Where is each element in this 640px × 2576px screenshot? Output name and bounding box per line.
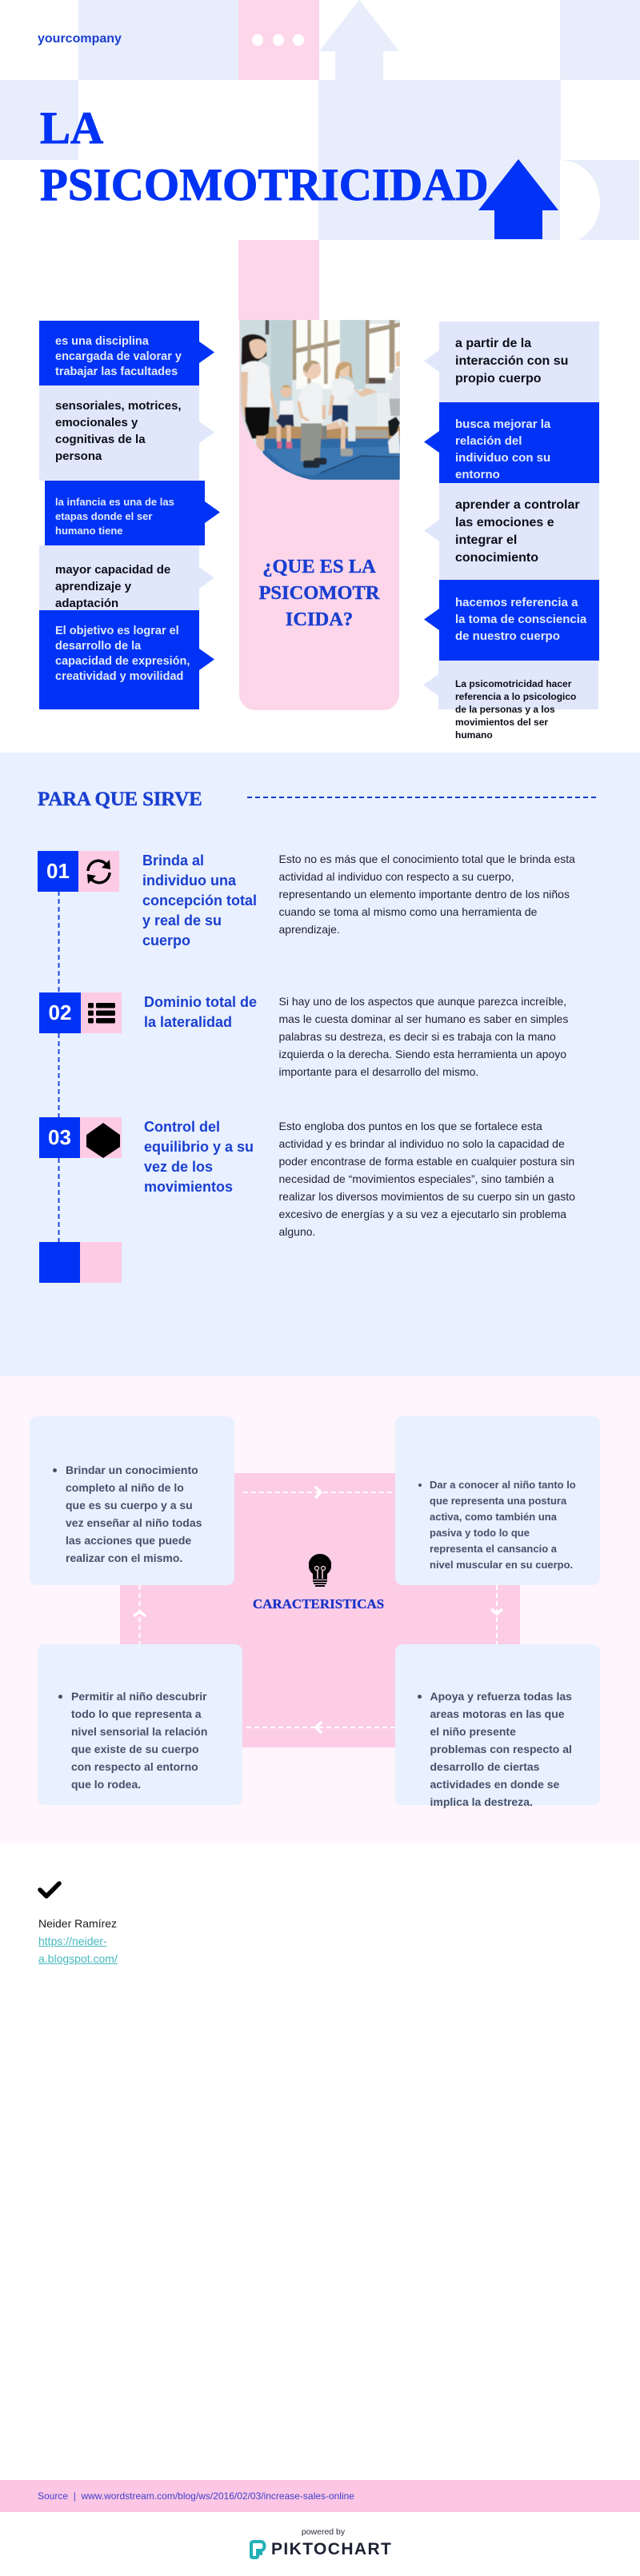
card text: Apoya y refuerza todas las (430, 1690, 572, 1703)
callout 1 (39, 321, 199, 385)
step title (144, 1119, 254, 1195)
callout 7: individuo con su (455, 451, 550, 465)
heading: caracteristicas: CARACTERISTICAS (253, 1596, 384, 1611)
step title: cuerpo (142, 933, 190, 949)
callout 8 (439, 483, 599, 580)
step text: actividad y es brindar al individuo no solo la capacidad de (278, 1137, 565, 1150)
callout 6: interacción con su (455, 354, 568, 368)
panel: caracteristicas (0, 1376, 640, 1843)
card 3 (38, 1644, 242, 1805)
number 01: 01 (46, 859, 70, 883)
callout 7 (439, 402, 599, 483)
callout 7: relación del (455, 434, 522, 448)
step title: Dominio total de (144, 994, 257, 1010)
callout 9 (439, 580, 599, 661)
panel: right definition callouts: movimientos del ser (455, 717, 548, 728)
card text: que lo rodea. (71, 1778, 141, 1791)
card 2 (395, 1416, 600, 1585)
card text: problemas con respecto al (430, 1743, 572, 1755)
logo wordmark: PIKTOCHART (271, 2540, 392, 2558)
callout 5: capacidad de expresión, (55, 655, 190, 668)
callout 5 (39, 610, 199, 709)
icon: list (81, 992, 122, 1033)
bullet (53, 1468, 57, 1472)
author credit: a.blogspot.com/ (38, 1952, 118, 1965)
step title: individuo una (142, 873, 236, 889)
step title: Brinda al (142, 853, 204, 869)
number 03: 03 (48, 1125, 71, 1149)
panel: para que sirve (0, 753, 640, 1376)
card text (430, 1479, 576, 1571)
callout 6: propio cuerpo (455, 372, 542, 385)
card text: areas motoras en las que (430, 1707, 565, 1720)
icon: light bulb (309, 1554, 331, 1587)
callout 9: la toma de consciencia (455, 613, 586, 626)
step text: actividad al individuo con respecto a su cuerpo, (278, 870, 514, 883)
source text: Source | www.wordstream.com/blog/ws/2016/02/03/increase-sales-online (38, 2490, 354, 2502)
callout 9: de nuestro cuerpo (455, 629, 560, 643)
callout 9: hacemos referencia a (455, 596, 578, 609)
heading: que es: ICIDA? (286, 609, 353, 630)
arrows: dashed connectors (133, 1486, 503, 1734)
card text: desarrollo de ciertas (430, 1760, 539, 1773)
card text: representa el cansancio a (430, 1543, 557, 1555)
header background tiles (0, 0, 640, 320)
heading: que es: ¿QUE ES LA (262, 556, 376, 577)
step 1 (38, 851, 575, 949)
callout 8: conocimiento (455, 551, 538, 565)
panel: right definition callouts (423, 322, 599, 741)
panel: que es la psicomotricidad (239, 320, 399, 710)
icon: pale up arrow (319, 0, 399, 80)
step text: poder encontrase de forma estable en cualquier postura sin (278, 1155, 574, 1168)
card 4 (395, 1644, 600, 1805)
empty final step (39, 1242, 122, 1283)
card text: las acciones que puede (66, 1534, 191, 1547)
callout 2: cognitivas de la (55, 433, 146, 446)
callout 7: entorno (455, 468, 500, 481)
step text: mas le cuesta dominar al ser humano es saber en simples (278, 1012, 568, 1025)
card text: que representa una postura (430, 1495, 566, 1507)
callout 6: a partir de la (455, 337, 531, 350)
author credit: Neider Ramírez (38, 1917, 117, 1930)
step title: concepción total (142, 893, 257, 909)
card text: completo al niño de lo (66, 1481, 184, 1494)
step text: izquierda o la derecha. Siendo esta herramienta un apoyo (278, 1048, 566, 1060)
card text (430, 1690, 572, 1808)
step text: alguno. (278, 1225, 315, 1238)
step title: la lateralidad (144, 1014, 232, 1030)
number 02 (39, 992, 81, 1033)
icon: check mark (38, 1881, 62, 1899)
logo: piktochart (250, 2540, 392, 2559)
menu dots (252, 34, 304, 46)
author credit: https://neider- (38, 1935, 107, 1947)
card text: nivel muscular en su cuerpo. (430, 1559, 573, 1571)
callout 3 (45, 481, 205, 545)
card text: implica la destreza. (430, 1795, 533, 1808)
step text: necesidad de “movimientos especiales”, sino también a (278, 1172, 554, 1185)
icon: hexagon (80, 1117, 122, 1158)
icon: blue up arrow (478, 159, 558, 239)
step text (278, 853, 575, 936)
callout 3: humano tiene (55, 525, 123, 537)
callout 10: de la personas y a los (455, 704, 555, 715)
card text: el niño presente (430, 1725, 516, 1738)
title: LA (40, 103, 103, 154)
bullet (58, 1695, 62, 1699)
card text: con respecto al entorno (71, 1760, 198, 1773)
card text: vez enseñar al niño todas (66, 1516, 202, 1529)
step text: representando un elemento importante dentro de los niños (278, 888, 570, 901)
heading: que es: PSICOMOTR (258, 582, 380, 604)
title: PSICOMOTRICIDAD (40, 160, 489, 210)
callout 4: adaptación (55, 597, 118, 610)
panel: left definition callouts (39, 321, 220, 709)
card text: nivel sensorial la relación (71, 1725, 207, 1738)
callout 2 (39, 385, 199, 481)
callout 4: mayor capacidad de (55, 563, 170, 577)
card text: Brindar un conocimiento (66, 1464, 198, 1476)
callout 7: busca mejorar la (455, 417, 550, 431)
callout 8: aprender a controlar (455, 498, 580, 512)
number 02: 02 (49, 1000, 71, 1024)
card text: activa, como también una (430, 1511, 557, 1523)
callout 5: desarrollo de la (55, 640, 141, 653)
step title (142, 853, 257, 949)
callout 1: es una disciplina (55, 335, 149, 348)
step text: cuando se toma al mismo como una herramienta de (278, 905, 537, 918)
callout 8: las emociones e (455, 516, 554, 529)
card text: Permitir al niño descubrir (71, 1690, 207, 1703)
logo mark (250, 2540, 266, 2559)
step text: Esto engloba dos puntos en los que se fortalece esta (278, 1120, 542, 1132)
card text (71, 1690, 207, 1791)
powered by: powered by (302, 2527, 345, 2537)
panel: right definition callouts: humano (455, 729, 493, 741)
callout 6 (439, 322, 599, 402)
author credit (38, 1917, 118, 1965)
card text: que es su cuerpo y a su (66, 1499, 193, 1512)
step title: vez de los (144, 1159, 213, 1175)
card text: actividades en donde se (430, 1778, 559, 1791)
callout 5: creatividad y movilidad (55, 670, 183, 683)
callout 4 (39, 545, 199, 610)
photo: children in gym class (240, 320, 400, 480)
callout 2: sensoriales, motrices, (55, 399, 182, 413)
step text: Esto no es más que el conocimiento total que le brinda esta (278, 853, 575, 865)
title (40, 103, 489, 210)
callout 5: El objetivo es lograr el (55, 625, 179, 637)
source bar (0, 2480, 640, 2512)
step title: Control del (144, 1119, 220, 1135)
number 03 (39, 1117, 80, 1158)
step text: palabras su destreza, es decir si es trabaja con la mano (278, 1030, 556, 1043)
callout 10: referencia a lo psicologico (455, 691, 576, 702)
bullet (418, 1484, 422, 1487)
card text: que existe de su cuerpo (71, 1743, 198, 1755)
step title: y real de su (142, 913, 222, 929)
step text: Si hay uno de los aspectos que aunque parezca increíble, (278, 995, 566, 1008)
number 01 (38, 851, 78, 892)
card 1 (30, 1416, 234, 1585)
card text: realizar con el mismo. (66, 1552, 182, 1564)
step text: aprendizaje. (278, 923, 340, 936)
company name: yourcompany (38, 32, 122, 46)
central pink block (120, 1473, 520, 1747)
card text: todo lo que representa a (71, 1707, 202, 1720)
callout 10: La psicomotricidad hacer (455, 678, 571, 689)
callout 3: etapas donde el ser (55, 510, 152, 522)
step title (144, 994, 257, 1030)
card text: Dar a conocer al niño tanto lo (430, 1479, 576, 1491)
step 3 (39, 1117, 575, 1238)
heading: que es (258, 556, 380, 630)
step 2 (39, 992, 568, 1078)
callout 10 (438, 661, 598, 709)
callout 8: integrar el (455, 533, 517, 547)
card text (66, 1464, 202, 1564)
step text: realizar los diversos movimientos de su cuerpo sin un gasto (278, 1190, 575, 1203)
callout 1: encargada de valorar y (55, 350, 182, 363)
step text: excesivo de energías y a su vez a ejecutarlo sin problema (278, 1208, 566, 1220)
icon: refresh (78, 851, 119, 892)
step text: importante para el desarrollo del mismo. (278, 1065, 478, 1078)
callout 2: emocionales y (55, 416, 138, 429)
callout 1: trabajar las facultades (55, 365, 178, 378)
bullet (418, 1695, 422, 1699)
callout 4: aprendizaje y (55, 580, 131, 593)
step title: movimientos (144, 1179, 233, 1195)
heading: para que sirve: PARA QUE SIRVE (38, 789, 202, 810)
step text (278, 1120, 575, 1238)
step title: equilibrio y a su (144, 1139, 254, 1155)
callout 2: persona (55, 449, 102, 463)
callout 3: la infancia es una de las (55, 496, 174, 508)
step text (278, 995, 568, 1078)
card text: pasiva y todo lo que (430, 1527, 530, 1539)
